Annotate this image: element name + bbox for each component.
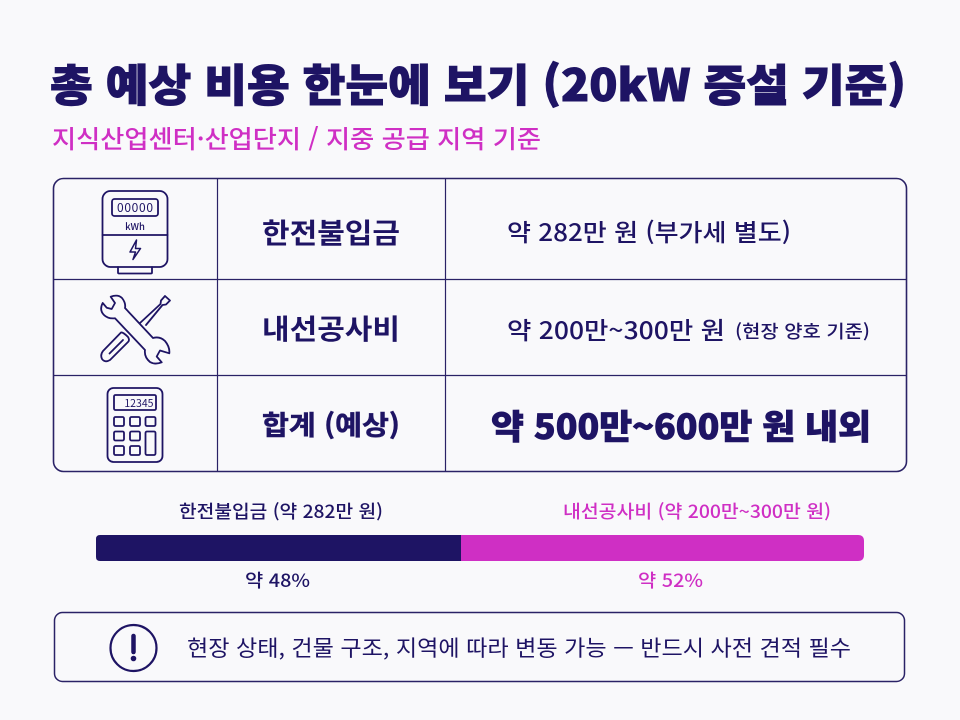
value: 52%: 약 52% (638, 567, 703, 593)
row 3 label: 합계 (예상) (262, 404, 400, 443)
callout: notice (54, 612, 904, 682)
panel: cost table (54, 178, 906, 472)
row 2 note: (현장 양호 기준) (735, 318, 870, 344)
bar segment: navy (96, 535, 461, 561)
icon: electric meter: 00000 (117, 199, 153, 216)
row 2 value: 약 200만~300만 원 (507, 311, 725, 346)
icon: exclamation (110, 625, 156, 671)
row 1 value: 약 282만 원 (부가세 별도) (507, 213, 791, 248)
row 1 label: 한전불입금 (262, 212, 400, 252)
value: 48%: 약 48% (245, 567, 310, 593)
icon: electric meter (102, 191, 168, 274)
notice text: 현장 상태, 건물 구조, 지역에 따라 변동 가능 — 반드시 사전 견적 필수 (187, 631, 851, 663)
bar chart: cost split (96, 498, 864, 593)
title: 총 예상 비용 한눈에 보기 (20kW 증설 기준) (50, 50, 906, 114)
row 2 label: 내선공사비 (262, 308, 400, 348)
icon: calculator: 12345 (124, 396, 154, 411)
icon: calculator (108, 388, 162, 462)
icon: electric meter: kWh (125, 219, 145, 233)
icon: wrench and screwdriver (101, 296, 170, 364)
row 3 value: 약 500만~600만 원 내외 (491, 400, 871, 449)
bar segment: magenta (461, 535, 864, 561)
label: panel fee share: 한전불입금 (약 282만 원) (179, 498, 383, 524)
subtitle: 지식산업센터·산업단지 / 지중 공급 지역 기준 (52, 120, 541, 156)
label: wiring cost share: 내선공사비 (약 200만~300만 원) (563, 498, 831, 524)
